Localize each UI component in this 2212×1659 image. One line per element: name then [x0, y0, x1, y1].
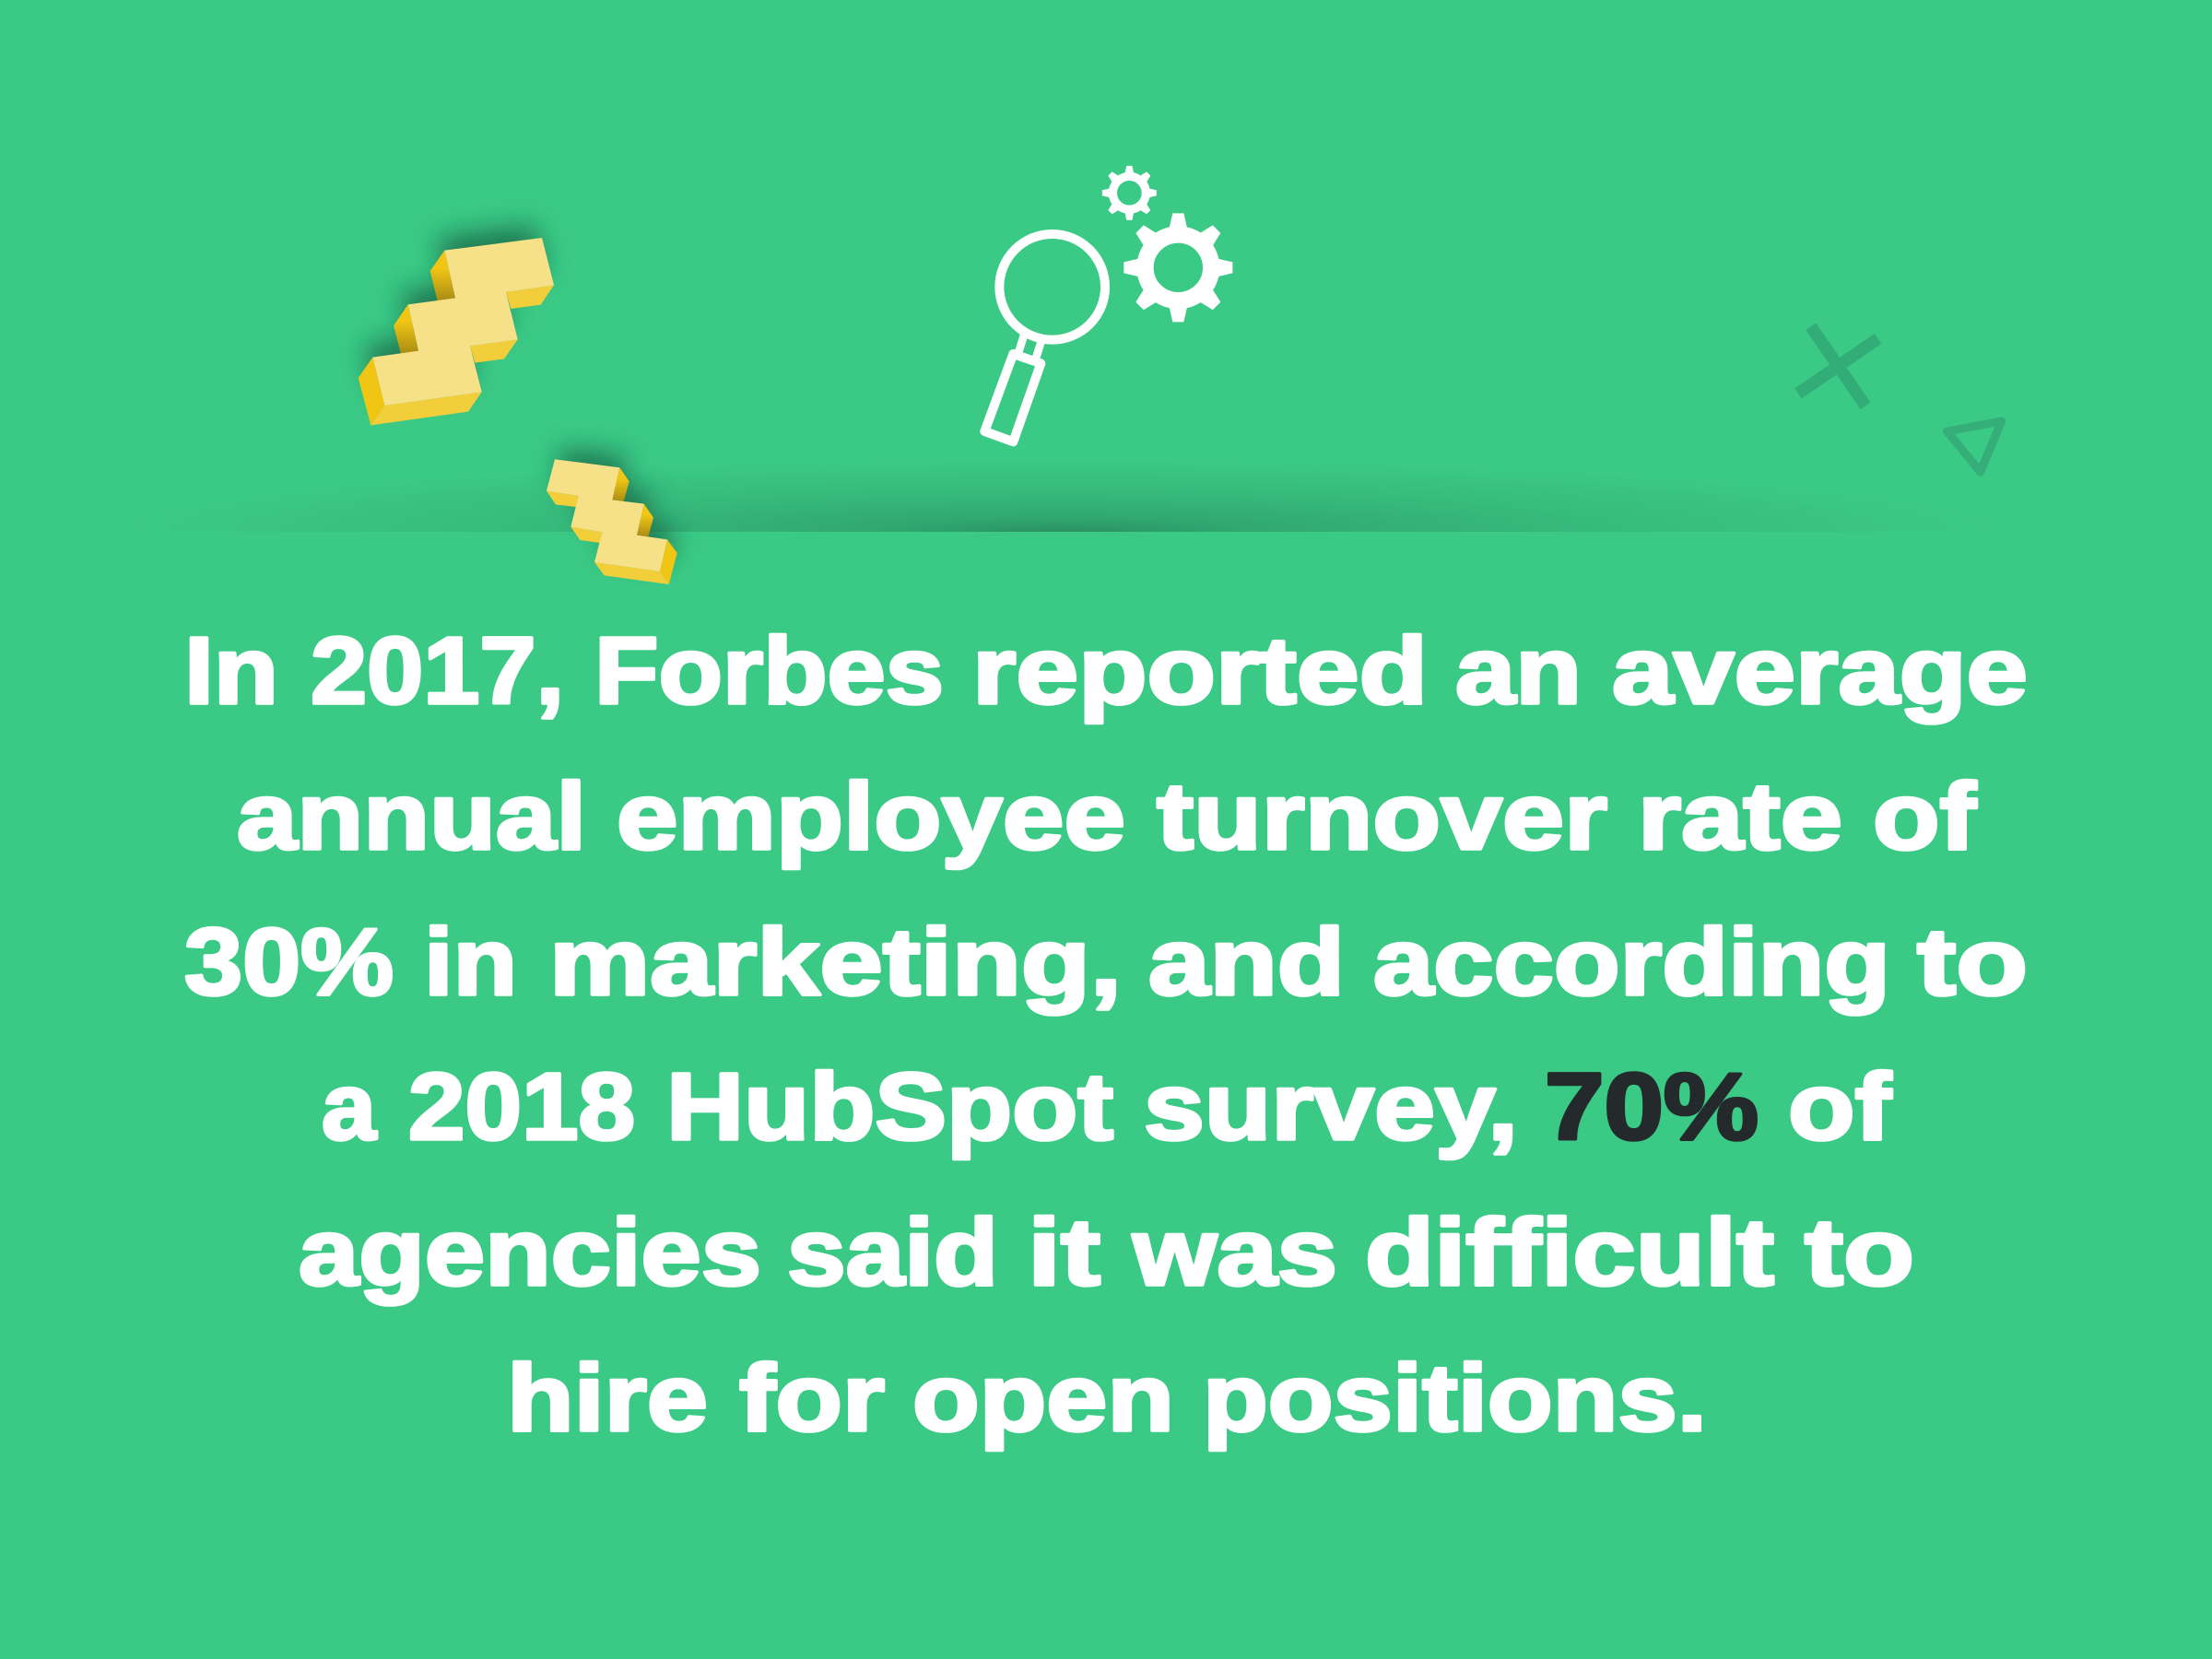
line 4: a [322, 1053, 377, 1159]
line 1: In [184, 618, 278, 724]
line 4: 70% [1545, 1053, 1759, 1159]
line 4: 2018 [408, 1053, 635, 1159]
line 3: marketing, [549, 909, 1122, 1015]
line 3: and [1148, 909, 1345, 1015]
line 2: annual [237, 763, 586, 869]
line 4: of [1788, 1053, 1892, 1159]
line 1: Forbes [594, 618, 944, 724]
line 5: said [787, 1199, 998, 1305]
line 5: it [1028, 1199, 1100, 1305]
line 6: for [739, 1345, 885, 1451]
line 3: to [1917, 909, 2028, 1015]
line 3: 30% [184, 909, 394, 1015]
line 1: an [1455, 618, 1582, 724]
line 2: employee [617, 763, 1125, 869]
line 2: turnover [1157, 763, 1607, 869]
line 3 [184, 909, 2028, 1015]
line 2 [237, 763, 1977, 869]
line 2: of [1873, 763, 1977, 869]
line 4 [322, 1053, 1892, 1159]
line 4: HubSpot [666, 1053, 1113, 1159]
icon: faint cross [1798, 326, 1878, 406]
statement text [184, 618, 2028, 1451]
icon: faint triangle [1947, 421, 2002, 472]
floor shadow [323, 476, 1799, 532]
line 3: in [424, 909, 517, 1015]
line 5 [299, 1199, 1914, 1305]
line 4: survey, [1144, 1053, 1518, 1159]
line 5: to [1805, 1199, 1914, 1305]
small yellow zigzag block [547, 448, 677, 584]
line 5: agencies [299, 1199, 761, 1305]
icon: magnifying glass [984, 234, 1105, 441]
line 5: difficult [1365, 1199, 1774, 1305]
line 1: average [1612, 618, 2028, 724]
line 6 [507, 1345, 1707, 1451]
line 6: hire [507, 1345, 708, 1451]
line 6: positions. [1203, 1345, 1707, 1451]
large yellow zigzag block [359, 226, 554, 425]
icon: large gear [1124, 213, 1232, 322]
line 1 [184, 618, 2028, 724]
icon: small gear [1102, 166, 1157, 220]
line 2: rate [1638, 763, 1842, 869]
line 5: was [1132, 1199, 1337, 1305]
line 3: according [1373, 909, 1890, 1015]
line 6: open [912, 1345, 1174, 1451]
line 1: reported [972, 618, 1428, 724]
line 1: 2017, [311, 618, 564, 724]
